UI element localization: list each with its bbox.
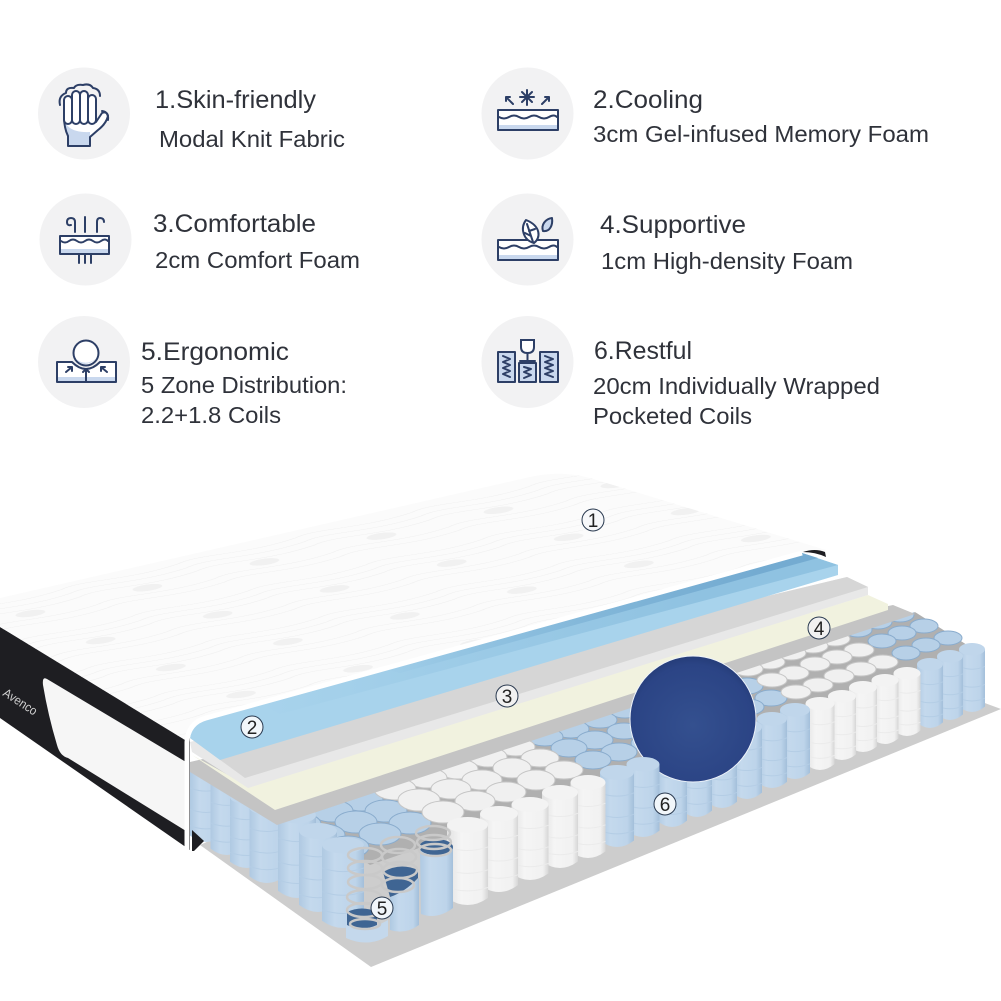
icon: ball pressing foam <box>38 316 130 408</box>
front coils right of ball <box>657 643 985 827</box>
navy pressure ball <box>630 656 756 782</box>
callout 5: 5 <box>377 899 387 920</box>
callout 2 <box>241 716 263 739</box>
heading: 3.Comfortable: 3.Comfortable <box>153 210 316 238</box>
white fabric edge strip <box>187 553 802 852</box>
text: 2cm Comfort Foam: 2cm Comfort Foam <box>155 247 360 273</box>
side coil row <box>190 760 364 928</box>
feature 1: skin-friendly <box>38 68 345 160</box>
front coils left of ball <box>447 757 660 905</box>
brand text: Avenco: Avenco <box>0 686 40 718</box>
callout 4: 4 <box>814 619 825 640</box>
heading: 6.Restful: 6.Restful <box>594 337 692 365</box>
heading: 1.Skin-friendly: 1.Skin-friendly <box>155 86 317 114</box>
icon: wine glass on pocket coils <box>482 316 574 408</box>
callout 3: 3 <box>502 687 512 708</box>
text: 5 Zone Distribution: 5 Zone Distribution: <box>141 372 347 398</box>
text: 1cm High-density Foam: 1cm High-density Foam <box>601 248 853 274</box>
text: Pocketed Coils: Pocketed Coils <box>593 403 752 429</box>
fabric end curl <box>803 550 826 557</box>
feature 2: cooling <box>482 68 929 160</box>
opened pocket coils with springs <box>346 826 453 943</box>
layer: comfort foam <box>190 577 868 788</box>
mattress cutaway illustration <box>0 474 1001 967</box>
heading: 4.Supportive: 4.Supportive <box>600 211 746 239</box>
icon: hand with bubbles <box>38 68 130 160</box>
layer: high-density foam <box>192 595 888 810</box>
icon: comfort foam <box>40 194 132 286</box>
text: Modal Knit Fabric: Modal Knit Fabric <box>159 126 345 152</box>
callout 6 <box>654 793 676 816</box>
layer: gel memory foam <box>190 553 838 760</box>
black mattress side panel <box>0 627 190 850</box>
quilted top fabric <box>0 474 826 740</box>
base sheet <box>200 700 1001 967</box>
feature 6: restful <box>482 316 880 429</box>
text: 2.2+1.8 Coils: 2.2+1.8 Coils <box>141 402 281 428</box>
callout 1: 1 <box>588 511 598 532</box>
callout 3 <box>496 685 518 708</box>
callout 2: 2 <box>247 718 257 739</box>
feature 5: ergonomic <box>38 316 347 428</box>
callout 1 <box>582 509 604 532</box>
text: 3cm Gel-infused Memory Foam: 3cm Gel-infused Memory Foam <box>593 121 929 147</box>
feature 3: comfortable <box>40 194 360 286</box>
text: 20cm Individually Wrapped: 20cm Individually Wrapped <box>593 373 880 399</box>
callout 4 <box>808 617 830 640</box>
heading: 5.Ergonomic: 5.Ergonomic <box>141 338 289 366</box>
callout 6: 6 <box>660 795 670 816</box>
heading: 2.Cooling: 2.Cooling <box>593 86 703 114</box>
icon: foam with leaves <box>482 194 574 286</box>
dark gap under strip <box>192 830 204 851</box>
white side label panel <box>43 678 186 831</box>
icon: cooling foam <box>482 68 574 160</box>
feature 4: supportive <box>482 194 853 286</box>
bottom felt sheet <box>190 605 915 825</box>
callout 5 <box>371 897 393 920</box>
coil tops <box>315 612 966 865</box>
